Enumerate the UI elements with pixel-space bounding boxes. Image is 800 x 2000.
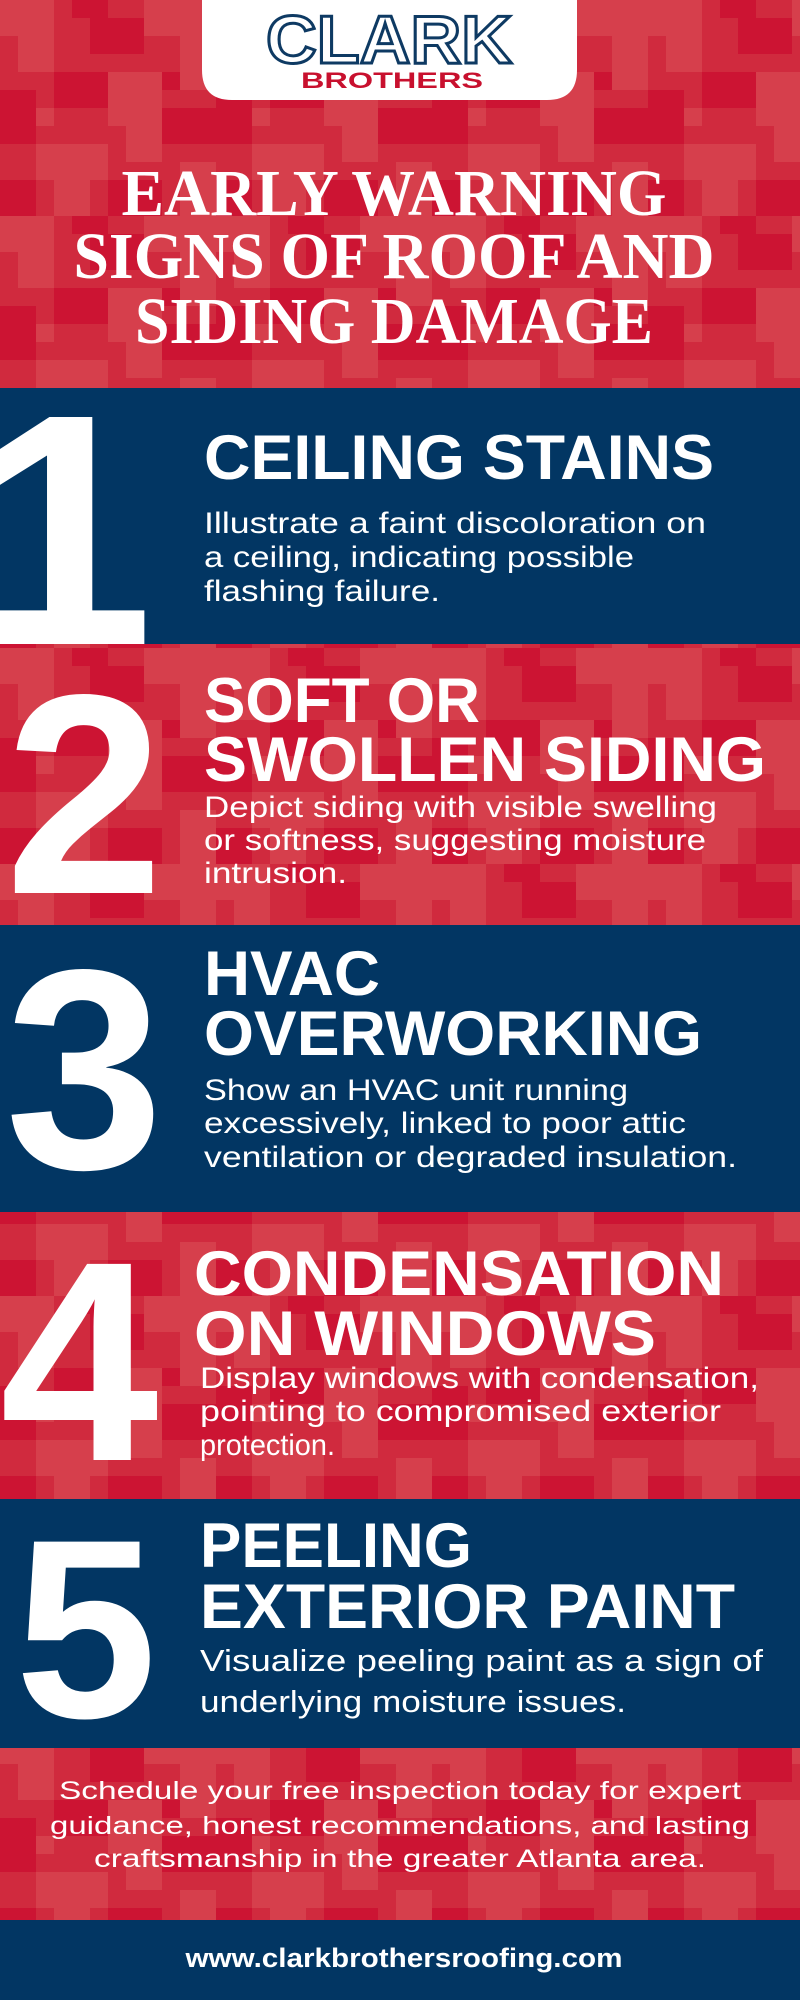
number 5: 5 [15, 1487, 157, 1772]
body 2 [204, 791, 717, 890]
title [74, 157, 714, 358]
panel 5: peeling paint [0, 1487, 800, 1772]
number 3: 3 [5, 911, 164, 1229]
heading 4: CONDENSATION [194, 1239, 724, 1309]
heading 3: OVERWORKING [204, 999, 702, 1069]
heading 5 [200, 1511, 735, 1642]
body 3 [204, 1074, 737, 1174]
call to action text: guidance, honest recommendations, and lasting [50, 1812, 750, 1840]
heading 2: SOFT OR [204, 666, 480, 736]
body 2: or softness, suggesting moisture [204, 824, 706, 857]
body 4 [200, 1362, 759, 1462]
panel 2: soft siding [5, 636, 766, 954]
call to action text: Schedule your free inspection today for expert [59, 1777, 741, 1805]
title: EARLY WARNING [122, 157, 666, 230]
logo box [202, 0, 577, 100]
body 5: Visualize peeling paint as a sign of [200, 1643, 763, 1678]
heading 2 [204, 666, 766, 795]
logo: CLARK: CLARK [266, 2, 512, 78]
heading 4 [194, 1239, 724, 1369]
heading 3 [204, 939, 702, 1069]
body 4: protection. [200, 1429, 335, 1462]
heading 3: HVAC [204, 939, 380, 1009]
heading 5: EXTERIOR PAINT [200, 1572, 735, 1642]
body 4: pointing to compromised exterior [200, 1395, 721, 1428]
body 2: Depict siding with visible swelling [204, 791, 717, 824]
logo: BROTHERS: BROTHERS [301, 68, 483, 93]
panel 4: condensation [0, 1203, 759, 1521]
body 1: Illustrate a faint discoloration on [204, 507, 706, 540]
body 1: a ceiling, indicating possible [204, 541, 634, 574]
body 1 [204, 507, 706, 608]
body 1: flashing failure. [204, 575, 440, 608]
number 2: 2 [5, 636, 164, 954]
heading 1: CEILING STAINS [204, 423, 714, 493]
title: SIDING DAMAGE [135, 285, 653, 358]
body 4: Display windows with condensation, [200, 1362, 759, 1395]
body 5 [200, 1643, 763, 1719]
number 4: 4 [0, 1203, 160, 1521]
body 2: intrusion. [204, 857, 347, 890]
heading 2: SWOLLEN SIDING [204, 725, 766, 795]
heading 5: PEELING [200, 1511, 472, 1581]
footer [0, 1920, 800, 2000]
body 3: ventilation or degraded insulation. [204, 1141, 737, 1174]
body 3: Show an HVAC unit running [204, 1074, 628, 1107]
body 3: excessively, linked to poor attic [204, 1107, 686, 1140]
panel 3: hvac [0, 911, 800, 1229]
panel 1: ceiling stains [0, 345, 800, 714]
heading 4: ON WINDOWS [194, 1299, 656, 1369]
call to action text: craftsmanship in the greater Atlanta area. [94, 1845, 706, 1873]
title: SIGNS OF ROOF AND [74, 220, 714, 293]
website url: www.clarkbrothersroofing.com [184, 1943, 622, 1973]
body 5: underlying moisture issues. [200, 1684, 626, 1719]
call to action text [50, 1777, 750, 1873]
